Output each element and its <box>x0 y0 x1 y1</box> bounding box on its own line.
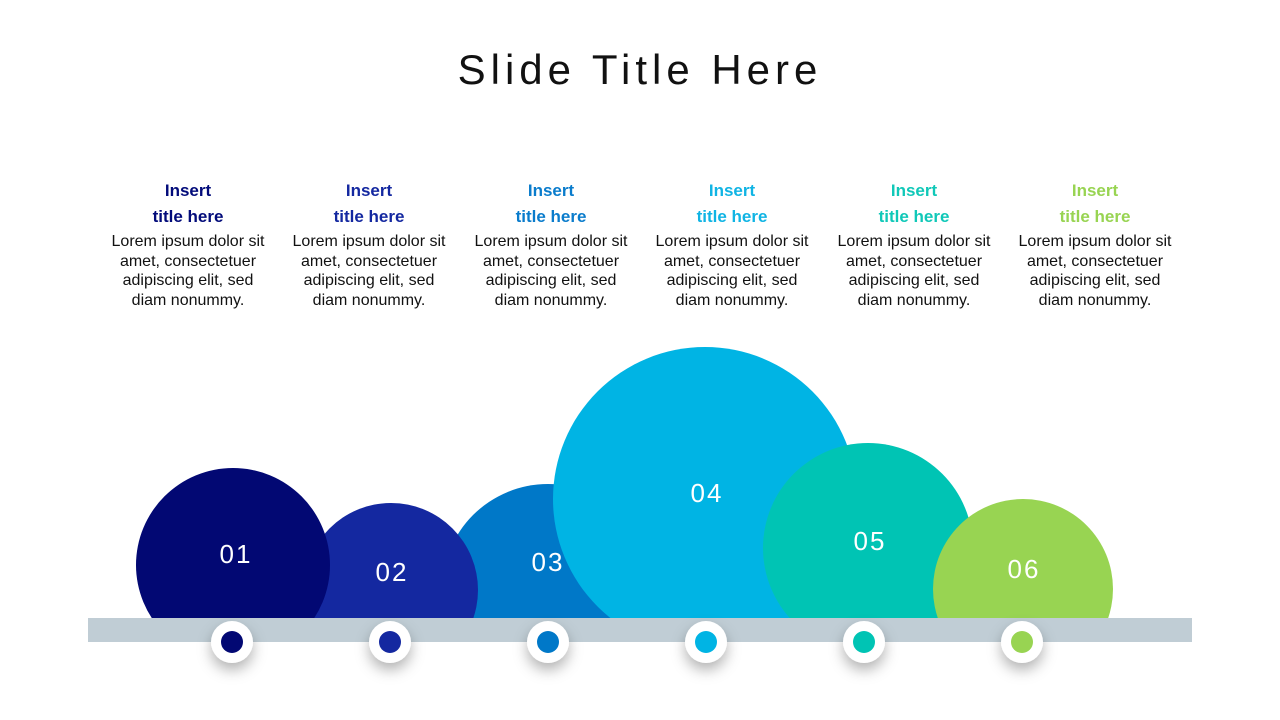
timeline markers <box>211 621 1043 663</box>
title: Slide Title Here <box>458 46 822 93</box>
text block 03 <box>475 181 628 308</box>
text block 05: diam nonummy. <box>858 292 970 308</box>
text block 01: diam nonummy. <box>132 292 244 308</box>
text block 04: Insert <box>709 181 755 200</box>
text block 04: amet, consectetuer <box>664 252 800 270</box>
text block 05: Insert <box>891 181 937 200</box>
text block 02: Insert <box>346 181 392 200</box>
text block 05 <box>838 181 990 308</box>
text block 03: Lorem ipsum dolor sit <box>475 233 627 250</box>
text block 02: adipiscing elit, sed <box>304 272 434 289</box>
text block 06: Insert <box>1072 181 1118 200</box>
text block 06 <box>1019 181 1172 308</box>
text block 05: title here <box>879 207 949 226</box>
text block 06: amet, consectetuer <box>1027 252 1163 270</box>
text block 01: Lorem ipsum dolor sit <box>112 233 264 250</box>
text block 04 <box>656 181 808 308</box>
text block 04: adipiscing elit, sed <box>667 272 797 289</box>
text block 03: Insert <box>528 181 574 200</box>
text block 06: diam nonummy. <box>1039 292 1151 308</box>
text block 06: adipiscing elit, sed <box>1030 272 1160 289</box>
text block 03: title here <box>516 207 586 226</box>
text block 02: amet, consectetuer <box>301 252 437 270</box>
circle 03 <box>458 484 610 618</box>
circle 02: 02 <box>376 557 408 587</box>
circle 01: 01 <box>220 539 252 569</box>
circle 03: 03 <box>532 547 564 577</box>
circle 06 <box>933 499 1113 618</box>
text block 03: adipiscing elit, sed <box>486 272 616 289</box>
text block 01: adipiscing elit, sed <box>123 272 253 289</box>
text block 02: Lorem ipsum dolor sit <box>293 233 445 250</box>
timeline bar <box>88 618 1192 642</box>
text block 04: Lorem ipsum dolor sit <box>656 233 808 250</box>
text block 04: diam nonummy. <box>676 292 788 308</box>
text block 03: amet, consectetuer <box>483 252 619 270</box>
text block 05: Lorem ipsum dolor sit <box>838 233 990 250</box>
text block 01: Insert <box>165 181 211 200</box>
text block 01: title here <box>153 207 223 226</box>
text block 03: diam nonummy. <box>495 292 607 308</box>
circle 05: 05 <box>854 526 886 556</box>
circle 05 <box>763 443 968 618</box>
text block 01 <box>112 181 264 308</box>
text block 05: adipiscing elit, sed <box>849 272 979 289</box>
circle 02 <box>314 503 478 618</box>
circle 01 <box>136 468 330 618</box>
text block 04: title here <box>697 207 767 226</box>
text block 02: title here <box>334 207 404 226</box>
text block 02 <box>293 181 446 308</box>
text block 06: title here <box>1060 207 1130 226</box>
circle 04: 04 <box>691 478 723 508</box>
circle 06: 06 <box>1008 554 1040 584</box>
chart: bubble timeline <box>88 347 1192 677</box>
text block 05: amet, consectetuer <box>846 252 982 270</box>
text block 06: Lorem ipsum dolor sit <box>1019 233 1171 250</box>
text block 02: diam nonummy. <box>313 292 425 308</box>
text block 01: amet, consectetuer <box>120 252 256 270</box>
circle 04 <box>553 347 847 618</box>
